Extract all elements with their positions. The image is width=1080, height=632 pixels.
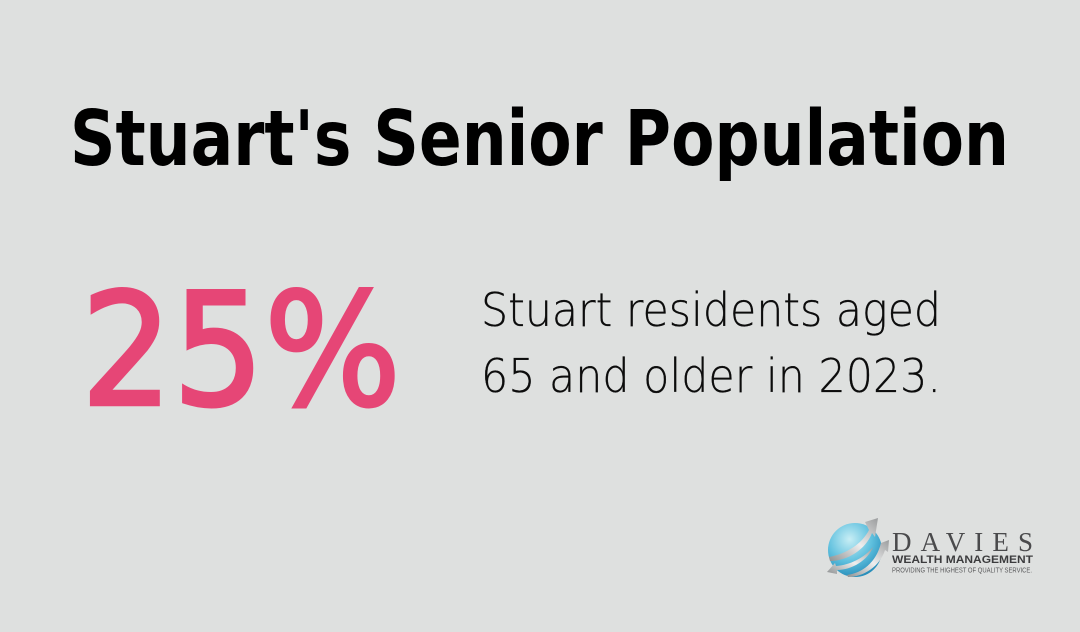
description text: 65 and older in 2023. xyxy=(481,349,941,403)
description text xyxy=(481,283,941,403)
icon: globe with arrows xyxy=(827,518,889,577)
wordmark: DAVIES: DAVIES xyxy=(892,527,1033,557)
tagline: PROVIDING THE HIGHEST OF QUALITY SERVICE. xyxy=(892,566,1032,574)
logo: Davies Wealth Management xyxy=(827,518,1033,577)
wordmark: Wealth Management: WEALTH MANAGEMENT xyxy=(892,554,1033,566)
description text: Stuart residents aged xyxy=(481,283,941,337)
statistic: 25%: 25% xyxy=(81,260,401,442)
